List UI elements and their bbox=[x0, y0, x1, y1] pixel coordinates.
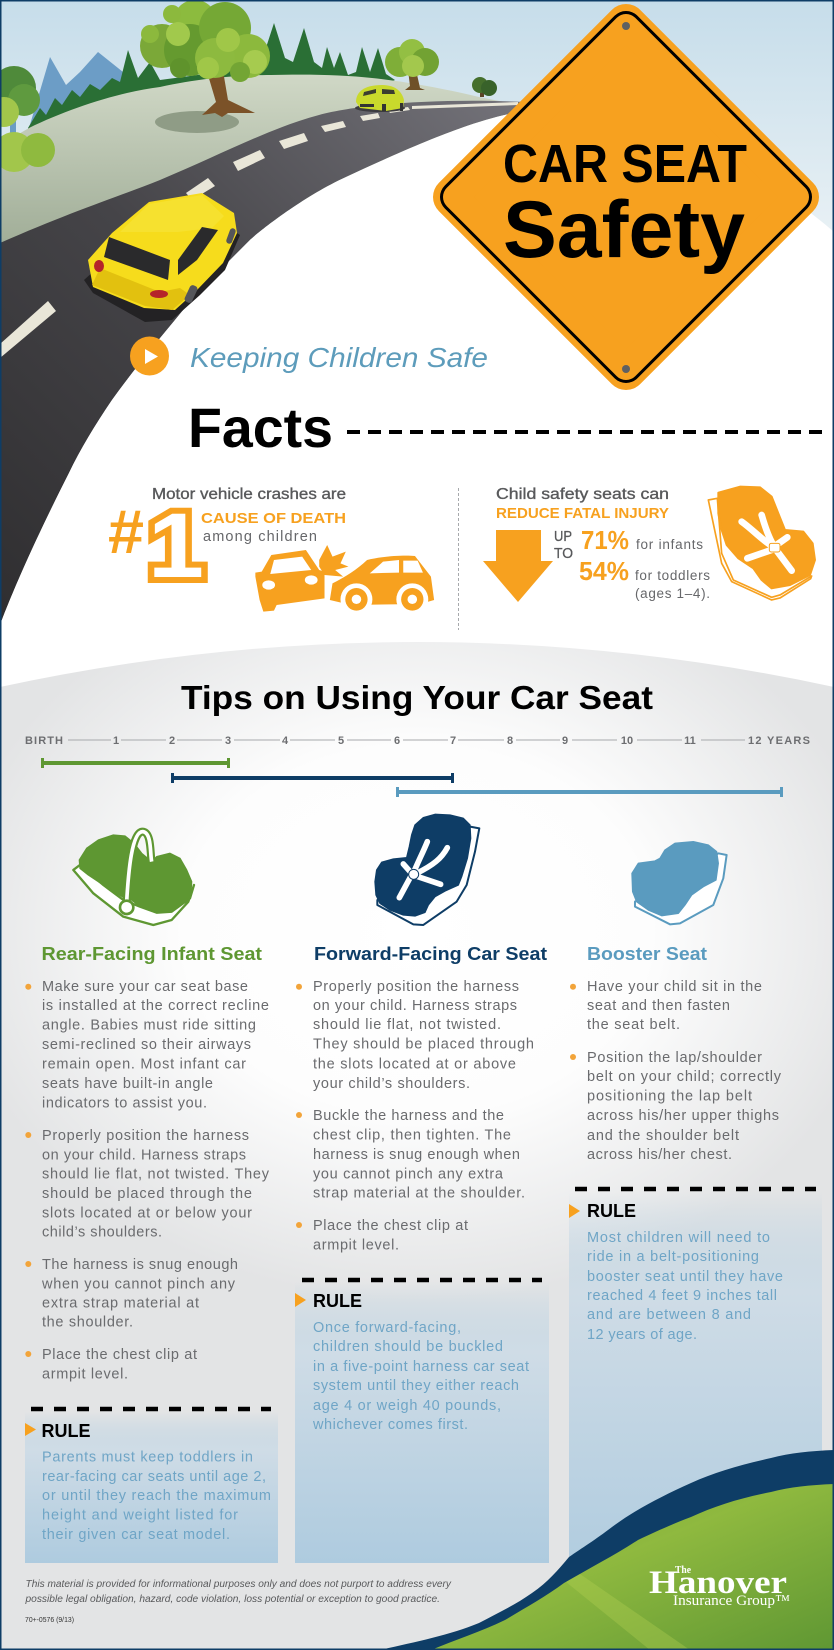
text block: infant seat tips: the shoulder. bbox=[42, 1314, 133, 1330]
text block: forward-facing seat tips: chest clip, then tighten. The bbox=[313, 1128, 511, 1144]
text block: forward-facing seat tips: strap material at the shoulder. bbox=[313, 1186, 525, 1202]
text block: infant seat tips: remain open. Most infant car bbox=[42, 1056, 246, 1072]
rule: booster: RULE bbox=[587, 1201, 636, 1221]
tiny tree bbox=[472, 77, 497, 97]
age timeline: 11 bbox=[684, 735, 696, 747]
rule: infant bbox=[25, 1409, 271, 1543]
age timeline: 12 YEARS bbox=[748, 735, 810, 747]
sign line 2: Safety bbox=[503, 185, 745, 275]
screw bottom bbox=[622, 365, 630, 373]
icon: down arrow bbox=[483, 530, 553, 602]
text block: booster seat tips: positioning the lap belt bbox=[587, 1088, 752, 1104]
rule: booster: ride in a belt-positioning bbox=[587, 1249, 759, 1265]
fact: number one cause of death: CAUSE OF DEATH bbox=[201, 510, 346, 527]
rule: forward-facing: Once forward-facing, bbox=[313, 1320, 461, 1336]
disclaimer: This material is provided for informational purposes only and does not purport to address every bbox=[26, 1579, 452, 1590]
text block: infant seat tips bbox=[25, 979, 270, 1382]
age timeline: 6 bbox=[394, 735, 400, 747]
sky bbox=[0, 0, 834, 240]
text block: infant seat tips: armpit level. bbox=[42, 1366, 128, 1382]
text block: booster seat tips bbox=[570, 979, 782, 1163]
fact: number one cause of death bbox=[108, 486, 434, 615]
illustration: road scene bbox=[0, 0, 834, 700]
rule: infant: rear-facing car seats until age 2, bbox=[42, 1469, 266, 1485]
logo: Hanover Insurance Group: The bbox=[675, 1565, 692, 1576]
white foreground hill bbox=[0, 111, 834, 700]
age bar: forward-facing seat bbox=[171, 773, 454, 783]
divider bbox=[458, 488, 460, 630]
mountains bbox=[0, 52, 140, 150]
heading: forward-facing car seat: Forward-Facing Car Seat bbox=[314, 944, 547, 964]
text block: forward-facing seat tips: you cannot pinch any extra bbox=[313, 1166, 504, 1182]
text block: infant seat tips: extra strap material at bbox=[42, 1296, 199, 1312]
text block: forward-facing seat tips: armpit level. bbox=[313, 1238, 399, 1254]
text block: booster seat tips: seat and then fasten bbox=[587, 998, 730, 1014]
text block: forward-facing seat tips bbox=[296, 979, 534, 1254]
age bar: infant seat bbox=[41, 758, 230, 768]
sign: car seat safety bbox=[453, 22, 799, 373]
facts dashed rule bbox=[347, 430, 828, 434]
logo: Hanover Insurance Group: Insurance Group™ bbox=[673, 1593, 790, 1609]
text block: booster seat tips: across his/her upper thighs bbox=[587, 1108, 779, 1124]
text block: booster seat tips: belt on your child; correctly bbox=[587, 1069, 782, 1085]
footer wave: green bbox=[431, 1484, 834, 1650]
fact: child safety seats: for infants bbox=[636, 537, 703, 552]
text block: infant seat tips: semi-reclined so their airways bbox=[42, 1037, 251, 1053]
road dashes bbox=[0, 102, 518, 358]
subtitle: Keeping Children Safe bbox=[190, 342, 488, 373]
text block: infant seat tips: is installed at the correct recline bbox=[42, 998, 269, 1014]
hash mark: # bbox=[108, 498, 144, 567]
rule box: forward-facing bbox=[295, 1282, 549, 1563]
pine forest bbox=[28, 23, 395, 140]
yellow car bbox=[84, 193, 240, 322]
age timeline: 9 bbox=[562, 735, 568, 747]
rule: forward-facing: children should be buckled bbox=[313, 1339, 503, 1355]
text block: infant seat tips: slots located at or below your bbox=[42, 1206, 252, 1222]
fact: number one cause of death: Motor vehicle crashes are bbox=[152, 486, 346, 503]
small tree bbox=[385, 39, 439, 90]
icon: infant seat bbox=[73, 832, 194, 925]
sign line 1: CAR SEAT bbox=[503, 134, 747, 194]
facts heading: Facts bbox=[188, 396, 333, 459]
fact: child safety seats: 71% bbox=[581, 525, 629, 555]
text block: infant seat tips: child’s shoulders. bbox=[42, 1224, 162, 1240]
text block: forward-facing seat tips: your child’s shoulders. bbox=[313, 1076, 470, 1092]
tips heading: Tips on Using Your Car Seat bbox=[181, 679, 653, 716]
age timeline: 4 bbox=[282, 735, 289, 747]
disclaimer: possible legal obligation, hazard, code violation, loss potential or exception to good practice. bbox=[24, 1594, 440, 1605]
age timeline bbox=[25, 735, 810, 747]
text block: infant seat tips: when you cannot pinch any bbox=[41, 1276, 236, 1292]
road bbox=[0, 101, 525, 625]
rule: booster: booster seat until they have bbox=[587, 1269, 783, 1285]
text block: infant seat tips: Place the chest clip at bbox=[42, 1347, 197, 1363]
footer wave: navy bbox=[380, 1450, 834, 1650]
fact: child safety seats: REDUCE FATAL INJURY bbox=[496, 505, 669, 522]
rule: forward-facing: age 4 or weigh 40 pounds, bbox=[313, 1398, 501, 1414]
distant car bbox=[355, 85, 405, 112]
icon: crashing cars bbox=[255, 545, 434, 615]
text block: forward-facing seat tips: They should be placed through bbox=[313, 1036, 534, 1052]
age bar: booster seat bbox=[396, 787, 783, 797]
fact: child safety seats: Child safety seats can bbox=[496, 486, 669, 503]
age timeline: 8 bbox=[507, 735, 513, 747]
rule: forward-facing: RULE bbox=[313, 1291, 362, 1311]
age timeline: 5 bbox=[338, 735, 344, 747]
fact: child safety seats: 54% bbox=[579, 556, 629, 586]
text block: forward-facing seat tips: should lie flat, not twisted. bbox=[313, 1017, 501, 1033]
rule: booster: reached 4 feet 9 inches tall bbox=[587, 1288, 777, 1304]
heading: booster seat: Booster Seat bbox=[587, 944, 707, 964]
rule: forward-facing: in a five-point harness car seat bbox=[313, 1359, 529, 1375]
text block: forward-facing seat tips: Buckle the harness and the bbox=[313, 1108, 504, 1124]
panel: tips background bbox=[0, 642, 834, 1650]
text block: booster seat tips: the seat belt. bbox=[587, 1017, 680, 1033]
icon: booster seat bbox=[632, 842, 727, 924]
fact: number one cause of death: among children bbox=[203, 529, 317, 545]
age timeline: 3 bbox=[225, 735, 231, 747]
text block: forward-facing seat tips: Properly position the harness bbox=[313, 979, 519, 995]
rule: booster: Most children will need to bbox=[587, 1230, 770, 1246]
text block: infant seat tips: The harness is snug enough bbox=[42, 1257, 238, 1273]
text block: infant seat tips: Make sure your car seat base bbox=[42, 979, 248, 995]
text block: infant seat tips: angle. Babies must ride sitting bbox=[42, 1018, 256, 1034]
text block: infant seat tips: should lie flat, not twisted. They bbox=[42, 1166, 270, 1182]
text block: infant seat tips: indicators to assist you. bbox=[42, 1096, 207, 1112]
text block: booster seat tips: Position the lap/shoulder bbox=[587, 1050, 762, 1066]
rule: infant: their given car seat model. bbox=[42, 1527, 230, 1543]
text block: forward-facing seat tips: on your child. Harness straps bbox=[313, 998, 517, 1014]
play bullet icon bbox=[130, 336, 169, 376]
screw top bbox=[622, 22, 630, 30]
age timeline: 10 bbox=[621, 735, 633, 747]
hill bbox=[0, 75, 525, 300]
text block: booster seat tips: across his/her chest. bbox=[587, 1147, 732, 1163]
fact: child safety seats: (ages 1–4). bbox=[635, 586, 710, 601]
outlined numeral one: 1 bbox=[148, 495, 204, 597]
text block: infant seat tips: on your child. Harness straps bbox=[42, 1148, 246, 1164]
rule: forward-facing bbox=[295, 1280, 542, 1433]
rule: infant: or until they reach the maximum bbox=[42, 1488, 271, 1504]
icon: forward-facing seat bbox=[375, 814, 479, 925]
text block: forward-facing seat tips: Place the chest clip at bbox=[313, 1218, 468, 1234]
rule: booster: and are between 8 and bbox=[587, 1307, 751, 1323]
rule: booster bbox=[569, 1189, 816, 1343]
left trees bbox=[0, 66, 55, 172]
disclaimer bbox=[24, 1579, 452, 1605]
rule: booster: 12 years of age. bbox=[587, 1327, 697, 1343]
fact: child safety seats: UP bbox=[554, 529, 572, 545]
heading: rear-facing infant seat: Rear-Facing Infant Seat bbox=[42, 944, 262, 964]
text block: booster seat tips: and the shoulder belt bbox=[587, 1128, 739, 1144]
text block: infant seat tips: should be placed through the bbox=[42, 1186, 252, 1202]
rule box: infant bbox=[25, 1412, 278, 1563]
text block: forward-facing seat tips: the slots located at or above bbox=[313, 1056, 516, 1072]
big tree bbox=[140, 0, 270, 133]
text block: infant seat tips: Properly position the harness bbox=[42, 1128, 249, 1144]
text block: forward-facing seat tips: harness is snug enough when bbox=[313, 1147, 520, 1163]
age timeline: BIRTH bbox=[25, 735, 63, 747]
fact: child safety seats: TO bbox=[554, 546, 573, 562]
rule: infant: RULE bbox=[42, 1421, 90, 1441]
text block: infant seat tips: seats have built-in angle bbox=[42, 1076, 213, 1092]
age timeline: 7 bbox=[450, 735, 456, 747]
text block: booster seat tips: Have your child sit in the bbox=[587, 979, 762, 995]
icon: orange car seat bbox=[708, 487, 815, 600]
logo: Hanover Insurance Group: Hanover bbox=[649, 1565, 787, 1601]
fact: child safety seats bbox=[483, 486, 815, 602]
age timeline: 2 bbox=[169, 735, 175, 747]
form number: 70+-0576 (9/13) bbox=[25, 1617, 74, 1624]
age timeline: 1 bbox=[113, 735, 119, 747]
rule box: booster bbox=[569, 1192, 822, 1592]
fact: child safety seats: for toddlers bbox=[635, 568, 710, 583]
rule: forward-facing: whichever comes first. bbox=[312, 1417, 468, 1433]
rule: infant: Parents must keep toddlers in bbox=[42, 1450, 253, 1466]
rule: forward-facing: system until they either reach bbox=[313, 1378, 519, 1394]
rule: infant: height and weight listed for bbox=[42, 1508, 238, 1524]
